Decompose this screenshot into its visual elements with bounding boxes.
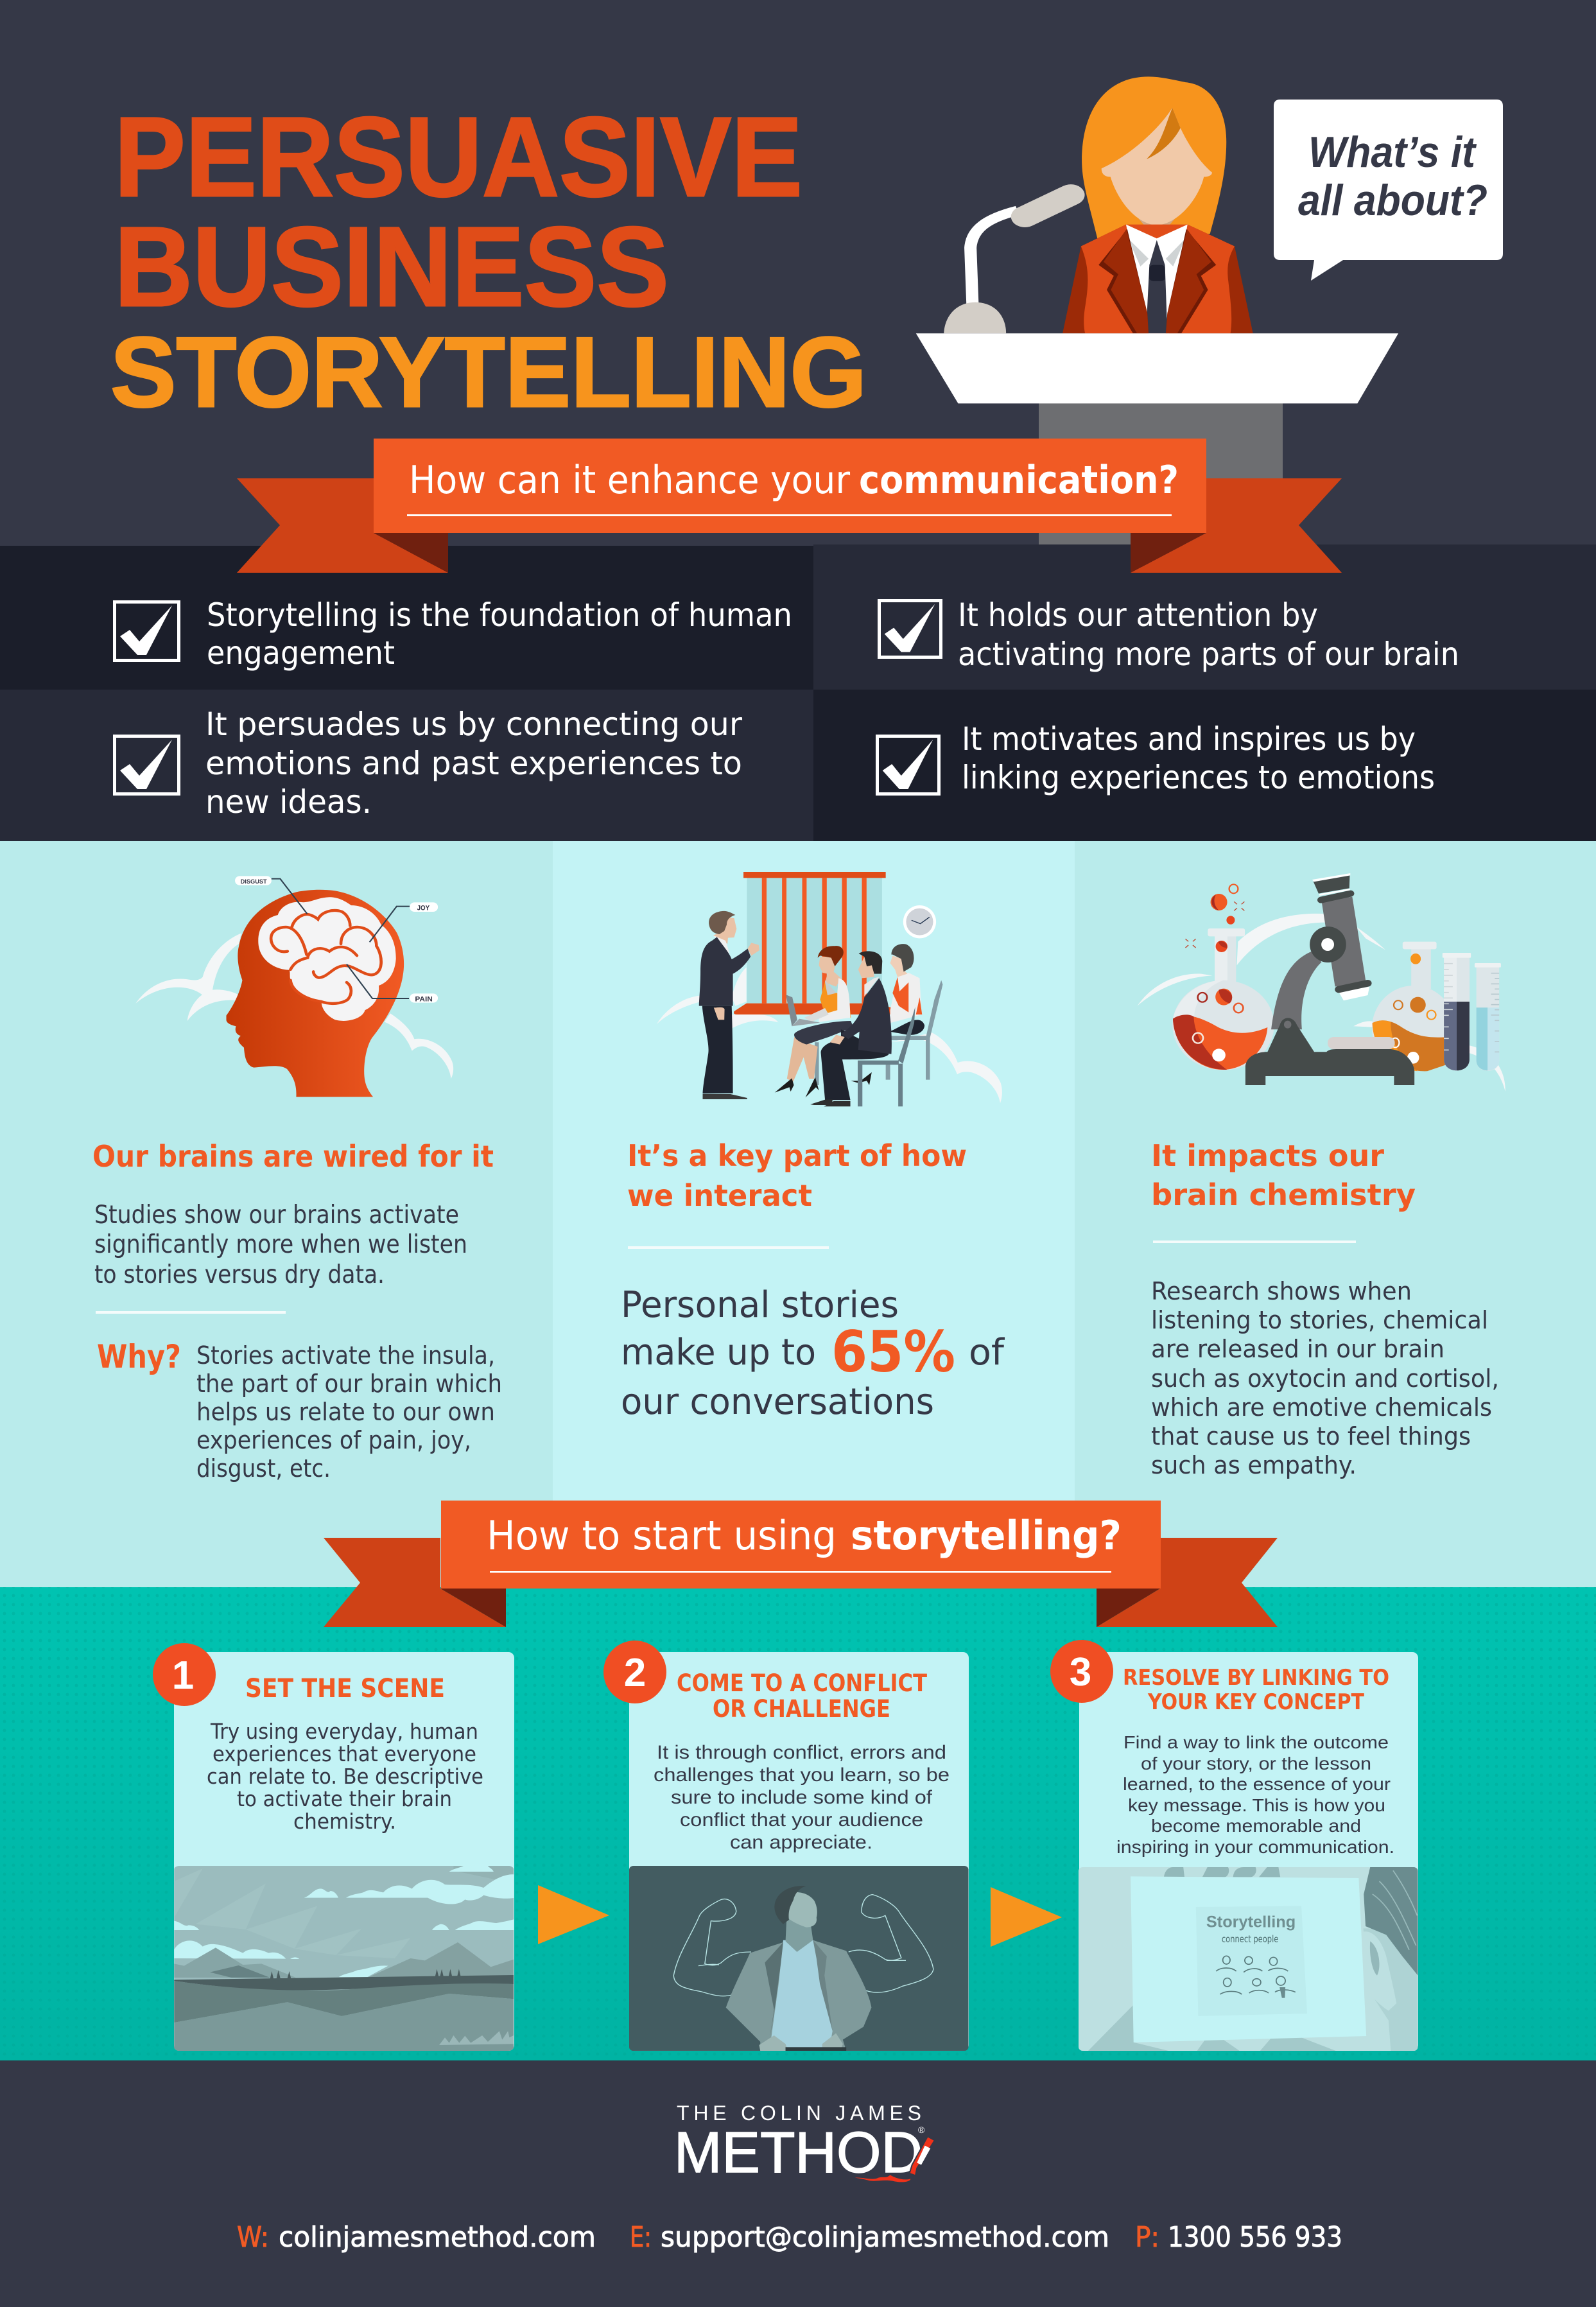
heading: chemistry: It impacts our: [1151, 1138, 1384, 1173]
heading: wired: Our brains are wired for it: [92, 1139, 494, 1174]
ribbon banner: how to start: How to start using: [487, 1512, 837, 1559]
step 1 text: to activate their brain: [237, 1786, 452, 1811]
text: research: Research shows when: [1151, 1277, 1412, 1305]
figure: woman with laptop: [775, 946, 853, 1097]
text: why explanation: Stories activate the insula,: [196, 1341, 495, 1370]
step 2 text: It is through conflict, errors and: [657, 1742, 946, 1763]
title: [110, 94, 867, 428]
why label: Why?: [97, 1338, 181, 1375]
statistic: 65% of conversations: of: [969, 1332, 1005, 1373]
badge 3: 3: [1070, 1650, 1091, 1694]
badge 2: 2: [624, 1651, 646, 1695]
step 3 card: [1050, 1640, 1418, 2051]
step 2 text: challenges that you learn, so be: [654, 1764, 950, 1786]
benefit: persuades: It persuades us by connecting our: [205, 706, 742, 743]
text: studies: Studies show our brains activate: [94, 1201, 459, 1230]
label: joy: JOY: [417, 905, 430, 912]
podium stand: [1039, 403, 1283, 546]
figure: presenter: [699, 911, 759, 1099]
contact details: 1300 556 933: [1168, 2221, 1342, 2254]
footer panel: [0, 2060, 1596, 2307]
chair legs back: [815, 980, 942, 1085]
text: why explanation: [196, 1341, 502, 1483]
step 3 text: of your story, or the lesson: [1141, 1754, 1371, 1773]
presenter figure: [1063, 76, 1253, 333]
heading: interact: we interact: [627, 1178, 812, 1213]
step 1 text: Try using everyday, human: [210, 1719, 478, 1744]
microscope: [1245, 873, 1414, 1085]
step 2 text: [654, 1742, 950, 1853]
benefit: attention: It holds our attention by: [958, 596, 1318, 634]
benefit: attention: activating more parts of our brain: [958, 636, 1459, 673]
badge 3: [1050, 1640, 1113, 1703]
teal steps background: [0, 1587, 1596, 2060]
title: STORYTELLING: [110, 317, 867, 428]
step 1 text: experiences that everyone: [213, 1741, 476, 1766]
statistic: 65% of conversations: our conversations: [621, 1381, 934, 1423]
step 3 text: become memorable and: [1151, 1816, 1361, 1836]
text: why explanation: helps us relate to our own: [196, 1398, 495, 1426]
text: why explanation: experiences of pain, joy,: [196, 1426, 471, 1454]
figure: seated man: [810, 951, 892, 1106]
step 2 image: man with chalk muscles: [629, 1866, 969, 2051]
step 1 title: SET THE SCENE: [245, 1674, 445, 1703]
step 3 title: YOUR KEY CONCEPT: [1147, 1689, 1365, 1715]
panel: key part of how we interact: [621, 872, 1005, 1423]
step 2 text: conflict that your audience: [680, 1809, 923, 1831]
arrow 2: [991, 1887, 1062, 1947]
step 3 image: storytelling note: connect people: [1222, 1933, 1278, 1945]
icon: head with brain: [135, 876, 453, 1097]
statistic: 65% of conversations: 65%: [831, 1319, 955, 1385]
chair front: [858, 1007, 915, 1106]
benefit: attention: [880, 596, 1459, 673]
text: research: which are emotive chemicals: [1151, 1393, 1492, 1422]
text: research: [1151, 1277, 1499, 1479]
icon: clock: [903, 905, 936, 938]
contact details: P:: [1135, 2221, 1159, 2254]
ribbon banner: communication: [237, 439, 1342, 573]
contact details: colinjamesmethod.com: [279, 2221, 596, 2254]
text: why explanation: disgust, etc.: [196, 1454, 331, 1483]
step 3 title: [1123, 1665, 1389, 1715]
text: research: that cause us to feel things: [1151, 1422, 1471, 1450]
benefits panel: [0, 544, 1596, 841]
panel: brain chemistry: [1137, 873, 1505, 1479]
title: BUSINESS: [114, 204, 669, 330]
ribbon banner: how to start: [324, 1501, 1278, 1627]
label: pain: [410, 993, 438, 1003]
step 1 card: [153, 1643, 514, 2051]
podium top: [916, 333, 1398, 403]
step 3 text: [1116, 1732, 1394, 1857]
benefit: motivates: linking experiences to emotions: [962, 759, 1435, 796]
heading: chemistry: [1151, 1138, 1416, 1212]
benefit: foundation: engagement: [207, 634, 395, 672]
figure: woman right: [851, 944, 924, 1085]
logo: METHOD: [674, 2121, 923, 2185]
test tube light: [1475, 963, 1501, 1071]
badge 2: [603, 1641, 666, 1703]
icon: microphone: [944, 195, 1071, 333]
arrow 1: [538, 1885, 609, 1944]
contact details: support@colinjamesmethod.com: [661, 2221, 1109, 2254]
speech bubble: all about?: [1298, 176, 1488, 225]
statistic: 65% of conversations: [621, 1284, 1005, 1423]
step 2 title: [677, 1669, 928, 1723]
step 2 title: OR CHALLENGE: [713, 1695, 890, 1723]
text: why explanation: the part of our brain which: [196, 1370, 502, 1398]
step 1 text: chemistry.: [293, 1809, 396, 1834]
step 2 text: sure to include some kind of: [671, 1787, 933, 1808]
text: research: listening to stories, chemical: [1151, 1306, 1488, 1334]
flask right: [1372, 942, 1455, 1071]
benefit: motivates: [877, 720, 1435, 796]
benefit: persuades: [114, 706, 742, 821]
step 3 text: Find a way to link the outcome: [1123, 1732, 1389, 1752]
badge 1: [153, 1643, 216, 1706]
header background: [0, 0, 1596, 546]
contact details: [237, 2221, 1342, 2254]
benefit: persuades: new ideas.: [205, 783, 372, 821]
illustration: meeting: [657, 872, 1002, 1106]
step 1 image: landscape: [174, 1866, 514, 2051]
step 3 image: storytelling note: [1079, 1867, 1418, 2051]
benefit: motivates: It motivates and inspires us by: [962, 720, 1416, 758]
ribbon banner: communication: How can it enhance your: [409, 458, 850, 503]
contact details: E:: [630, 2221, 652, 2254]
heading: interact: [627, 1138, 967, 1213]
contact details: W:: [237, 2221, 269, 2254]
logo: THE COLIN JAMES: [677, 2102, 921, 2125]
text: studies: significantly more when we listen: [94, 1230, 467, 1259]
statistic: 65% of conversations: Personal stories: [621, 1284, 899, 1326]
label: joy: [410, 902, 438, 912]
step 2 title: COME TO A CONFLICT: [677, 1669, 928, 1697]
text: research: such as oxytocin and cortisol,: [1151, 1364, 1499, 1393]
step 3 text: key message. This is how you: [1128, 1795, 1385, 1815]
science panel backgrounds: [0, 841, 1596, 1587]
panel: brains wired: [92, 876, 502, 1483]
step 3 text: learned, to the essence of your: [1123, 1774, 1391, 1794]
text: studies: to stories versus dry data.: [94, 1260, 385, 1289]
text: research: are released in our brain: [1151, 1335, 1444, 1363]
test tube dark: [1443, 953, 1471, 1070]
benefit: foundation: Storytelling is the foundation of human: [207, 596, 792, 634]
flask left: [1172, 884, 1274, 1070]
text: studies: [94, 1201, 467, 1289]
text: research: such as empathy.: [1151, 1451, 1357, 1479]
step 1 text: [207, 1719, 483, 1834]
heading: interact: It’s a key part of how: [627, 1138, 967, 1173]
step 3 image: storytelling note: Storytelling: [1206, 1912, 1296, 1931]
step 1 text: can relate to. Be descriptive: [207, 1764, 483, 1789]
ribbon banner: how to start: storytelling?: [851, 1512, 1122, 1559]
statistic: 65% of conversations: make up to: [621, 1332, 816, 1373]
benefit: foundation: [114, 596, 792, 672]
logo: ®: [918, 2125, 925, 2135]
step 3 title: RESOLVE BY LINKING TO: [1123, 1665, 1389, 1691]
speech bubble: [1274, 100, 1503, 281]
illustration: presenter at podium: [916, 76, 1398, 403]
illustration: lab equipment: [1137, 873, 1505, 1092]
heading: chemistry: brain chemistry: [1151, 1178, 1416, 1212]
benefit: persuades: emotions and past experiences to: [205, 745, 742, 782]
label: pain: PAIN: [415, 996, 433, 1003]
badge 1: 1: [172, 1653, 194, 1698]
label: disgust: [235, 876, 272, 885]
step 2 text: can appreciate.: [730, 1832, 872, 1853]
step 3 text: inspiring in your communication.: [1116, 1837, 1394, 1857]
speech bubble: What’s it: [1308, 128, 1477, 177]
title: PERSUASIVE: [114, 94, 802, 220]
ribbon banner: communication: communication?: [859, 458, 1179, 503]
label: disgust: DISGUST: [241, 878, 267, 885]
step 2 card: [603, 1641, 969, 2051]
